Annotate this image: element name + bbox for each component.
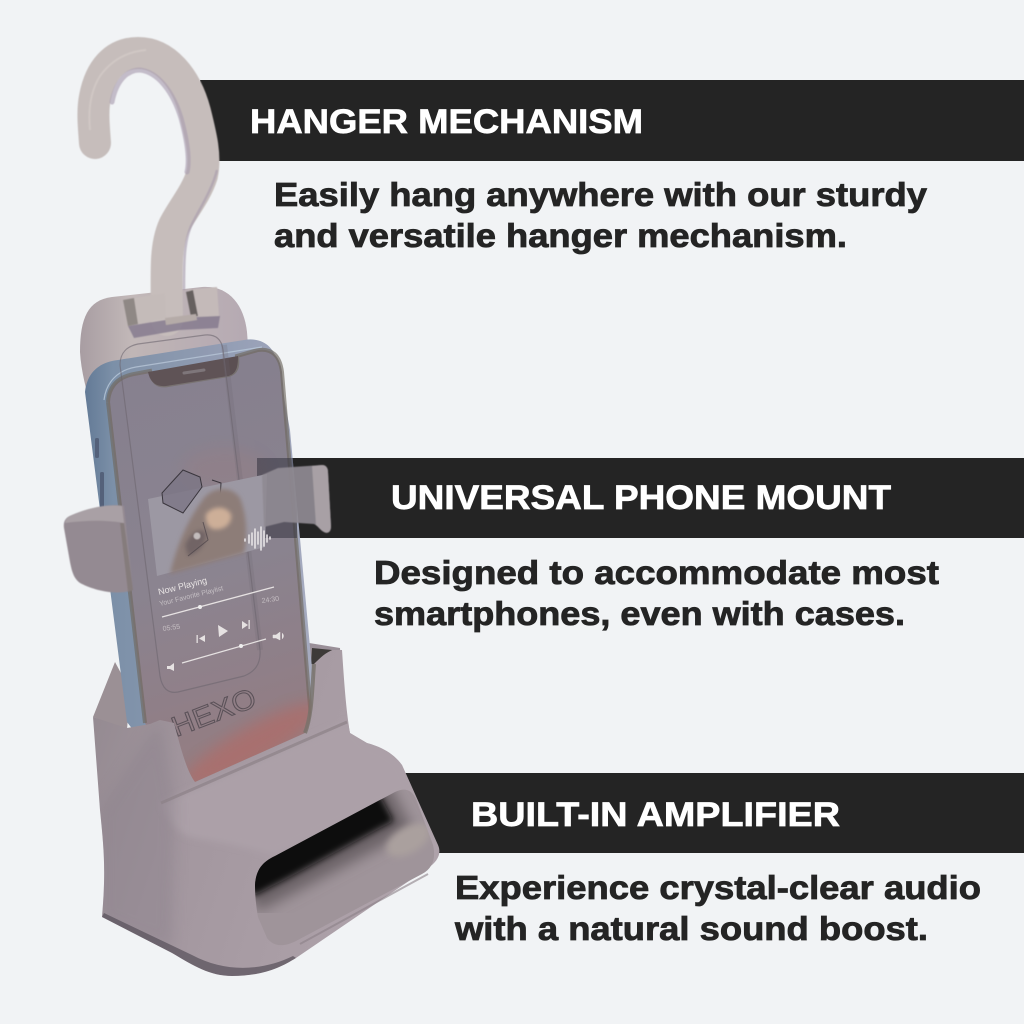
album art xyxy=(148,470,270,576)
heading: hanger mechanism: HANGER MECHANISM xyxy=(250,103,643,141)
side buttons xyxy=(95,438,104,508)
phone screen xyxy=(108,350,315,805)
total time: 24:30 xyxy=(261,596,280,605)
screen bezel xyxy=(108,350,312,730)
cradle body xyxy=(93,650,439,976)
lower left shadow xyxy=(100,748,175,942)
volume knob xyxy=(239,644,243,648)
text: phone mount description: smartphones, even with cases. xyxy=(374,595,905,632)
text: phone mount description: Designed to accommodate most xyxy=(374,554,939,591)
bar seen through the phone xyxy=(257,458,297,538)
progress knob xyxy=(198,605,202,609)
top ramp surface xyxy=(174,725,412,836)
icon: hanger hook xyxy=(89,50,217,320)
text: phone mount description xyxy=(374,554,939,632)
translucent plate centre rib xyxy=(224,345,260,650)
hinge clip xyxy=(123,287,220,338)
text: amplifier description: with a natural sound boost. xyxy=(454,910,928,947)
heading bar: universal phone mount xyxy=(256,458,1024,538)
panel: built-in amplifier xyxy=(400,773,1024,947)
sound wave xyxy=(245,527,270,550)
red glow xyxy=(189,458,310,782)
right holder arm xyxy=(262,465,331,533)
amplifier base xyxy=(93,650,439,976)
smartphone body xyxy=(85,334,313,782)
text: hanger mechanism description xyxy=(274,176,928,254)
text: amplifier description: Experience crystal-clear audio xyxy=(455,869,981,906)
horn mouth xyxy=(255,790,434,945)
back plate xyxy=(80,287,252,410)
music player controls xyxy=(157,575,284,671)
heading: universal phone mount: UNIVERSAL PHONE MOUNT xyxy=(391,479,891,517)
bottom edge shadow xyxy=(102,913,296,976)
playback buttons xyxy=(196,620,250,643)
volume slider xyxy=(182,639,266,663)
left holder arm xyxy=(64,505,133,592)
cradle back wall xyxy=(93,642,345,735)
phone frame xyxy=(85,339,320,805)
playlist text: Your Favorite Playlist xyxy=(159,585,224,608)
progress bar xyxy=(162,587,274,617)
translucent rear plate outline xyxy=(120,335,260,692)
heading bar: built-in amplifier xyxy=(400,773,1024,853)
text: amplifier description xyxy=(454,869,981,947)
hexagon logo xyxy=(162,470,202,513)
earpiece xyxy=(184,370,204,373)
heading bar: hanger mechanism xyxy=(200,80,1024,161)
text: hanger mechanism description: Easily hang anywhere with our sturdy xyxy=(274,176,928,213)
heading: built-in amplifier: BUILT-IN AMPLIFIER xyxy=(471,796,840,834)
product illustration: phone hanger stand xyxy=(64,50,439,976)
elapsed time: 05:55 xyxy=(162,624,181,633)
panel: universal phone mount xyxy=(256,458,1024,632)
horn mouth shading xyxy=(245,805,435,888)
base surfaces and shading xyxy=(100,720,412,976)
top frame highlight xyxy=(104,347,262,400)
notch xyxy=(148,356,238,386)
volume high icon xyxy=(273,632,284,640)
HEXO embossed logo: HEXO xyxy=(167,682,260,743)
panel: hanger mechanism xyxy=(200,80,1024,254)
volume low icon xyxy=(167,663,174,671)
printed ledge line xyxy=(161,722,347,803)
track text: Now Playing xyxy=(157,575,208,597)
cradle inner edge xyxy=(305,664,314,733)
text: hanger mechanism description: and versatile hanger mechanism. xyxy=(274,217,847,254)
mouth lip line xyxy=(300,874,428,944)
portrait xyxy=(170,489,246,574)
